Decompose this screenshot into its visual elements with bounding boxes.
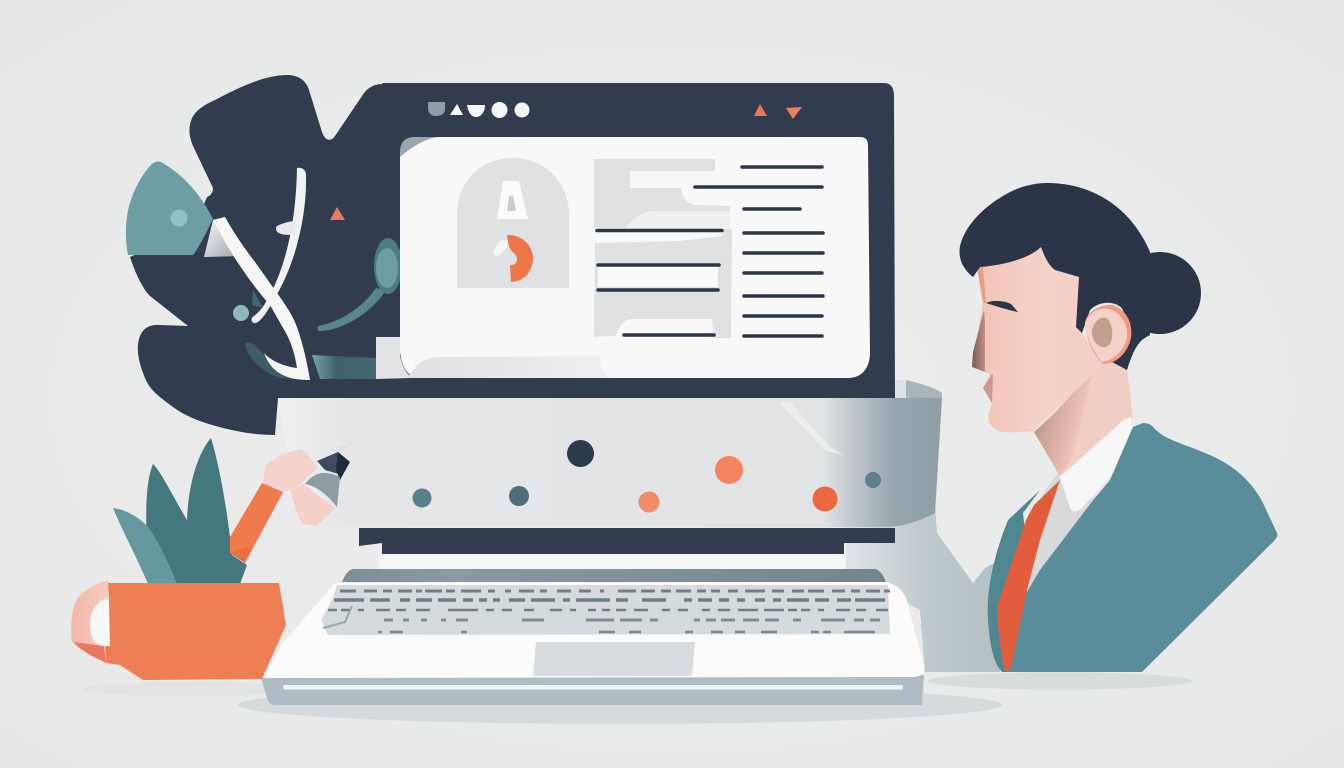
grey text blocks	[594, 159, 732, 338]
hand holding device	[263, 440, 357, 526]
laptop deck	[263, 582, 924, 678]
monitor contents	[376, 102, 870, 379]
monitor frame	[376, 83, 895, 398]
small coral triangle	[330, 207, 345, 220]
monstera leaf	[126, 75, 402, 435]
leaf teal tip	[126, 161, 213, 255]
collar	[1060, 417, 1132, 511]
plant	[113, 438, 247, 584]
window controls	[428, 102, 802, 119]
right text lines	[695, 167, 823, 336]
face	[972, 247, 1103, 432]
ear	[1085, 305, 1131, 364]
cup handle	[71, 581, 110, 663]
ground shadows	[82, 672, 1192, 724]
laptop front edge	[261, 675, 924, 705]
grey arm behind laptop	[846, 505, 1000, 672]
hinge band with dots	[278, 380, 942, 527]
tie	[997, 480, 1060, 672]
leaf teal sprig	[245, 238, 402, 380]
shirt	[1022, 473, 1097, 600]
leaf veins	[204, 168, 310, 380]
left text lines	[597, 230, 722, 335]
orange cup	[71, 581, 286, 680]
person	[960, 183, 1277, 672]
device held	[305, 440, 357, 507]
keyboard	[321, 585, 890, 635]
laptop hinge	[359, 528, 895, 554]
jacket	[988, 423, 1277, 672]
laptop base	[261, 554, 924, 705]
hair	[960, 183, 1150, 370]
screen reflection	[779, 402, 844, 455]
eyebrow	[986, 301, 1018, 312]
lock card	[457, 158, 569, 288]
neck	[1034, 358, 1133, 476]
orange sleeve arm	[230, 483, 283, 563]
screen panel	[376, 137, 870, 379]
trackpad	[533, 642, 695, 676]
hair bun	[1119, 252, 1201, 334]
